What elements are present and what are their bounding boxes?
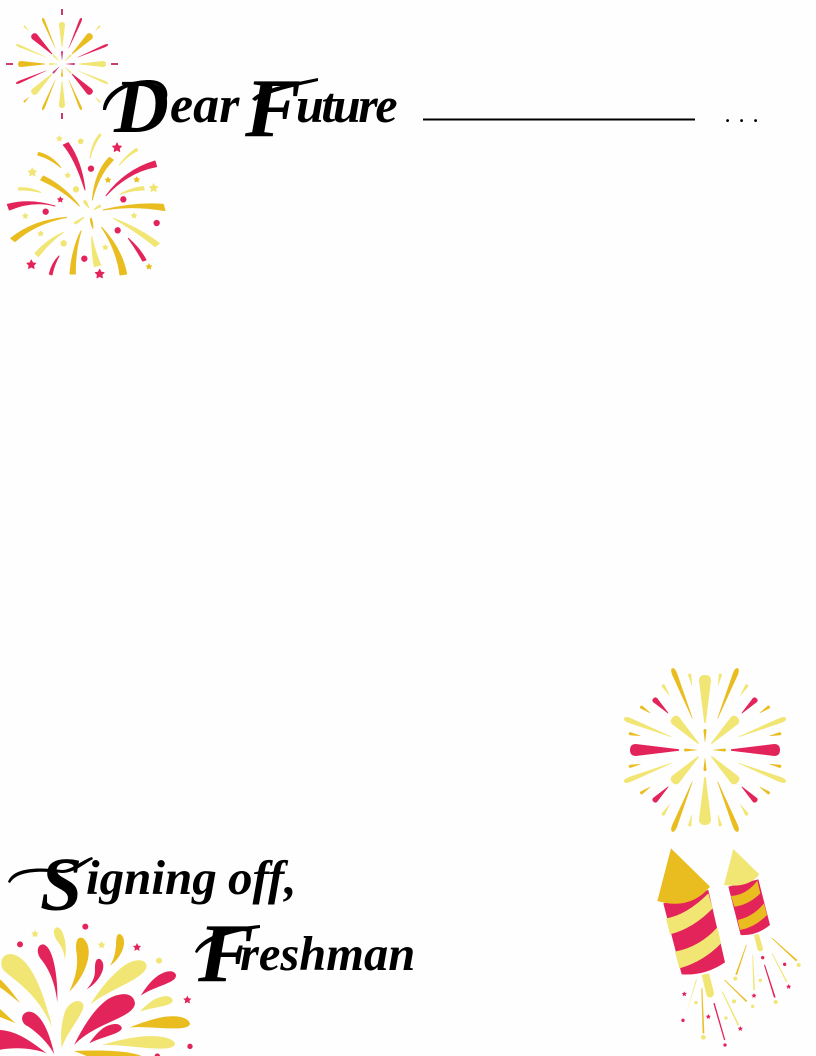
rockets illustration: [657, 848, 801, 1047]
closing: Signing off,: S: [40, 843, 82, 927]
firework: bottom-left splash burst: [0, 924, 193, 1056]
rocket exhaust sparks: [681, 938, 801, 1047]
ellipsis: ...: [726, 106, 768, 126]
closing: Freshman: reshman: [240, 928, 415, 981]
closing: Signing off,: [8, 827, 296, 927]
heading: Dear Future: ear: [170, 77, 240, 134]
closing: Signing off,: igning: [86, 850, 217, 905]
firework: left curved streak burst: [7, 134, 165, 278]
firework: top-left radial burst: [6, 9, 118, 119]
closing: Freshman: [195, 907, 415, 1000]
closing: Freshman: F: [198, 907, 254, 1000]
heading: Dear Future: uture: [296, 77, 397, 133]
heading: Dear Future: F: [244, 62, 301, 155]
heading: Dear Future: D: [114, 65, 169, 149]
blank name line: [423, 118, 695, 120]
heading: Dear Future: [103, 55, 397, 155]
rocket: large left: [657, 848, 725, 998]
firework: lower right radial burst: [623, 667, 787, 833]
rocket: small right: [724, 849, 770, 951]
closing: Signing off,: off,: [228, 850, 296, 905]
